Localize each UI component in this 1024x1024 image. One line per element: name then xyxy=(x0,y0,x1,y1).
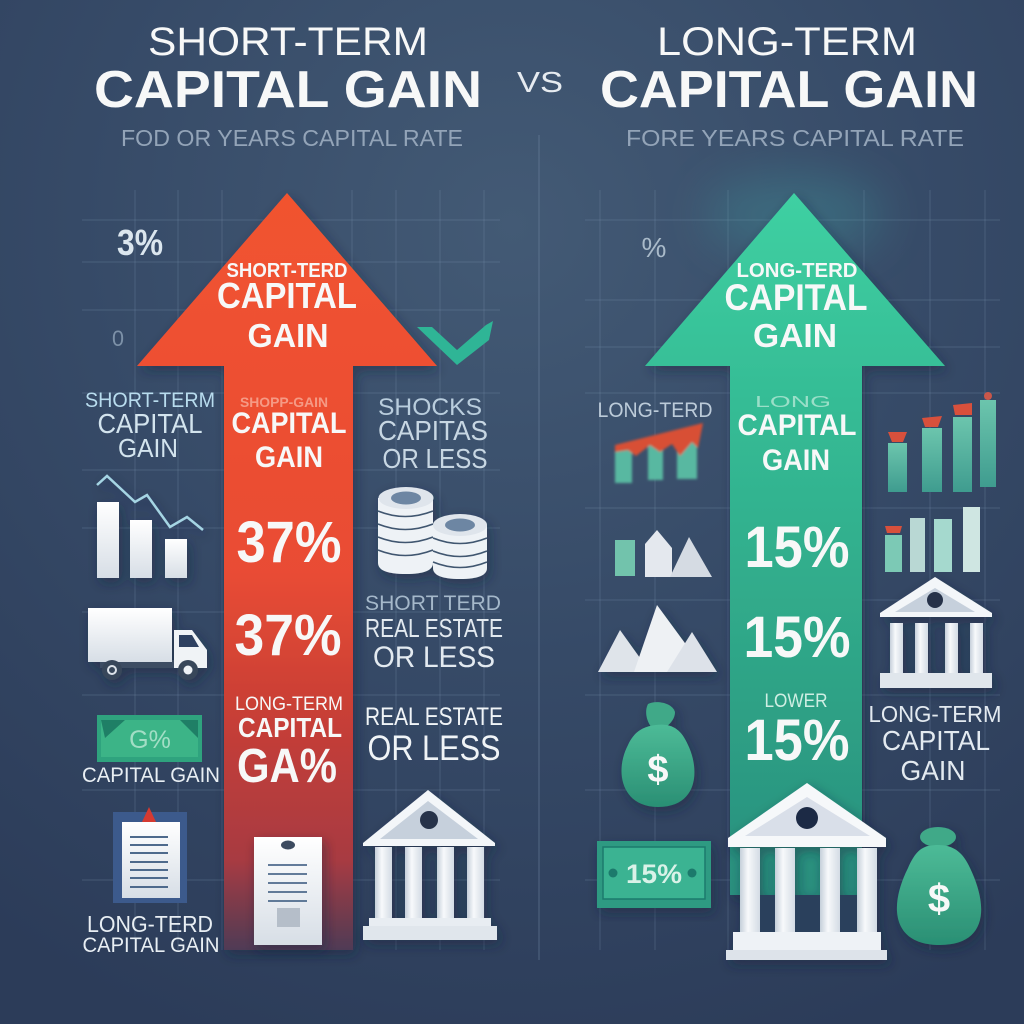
shaft label xyxy=(232,394,346,474)
title: long-term: LONG-TERM xyxy=(657,20,917,64)
shaft label: SHOPP-GAIN xyxy=(240,394,328,410)
icon: banknote xyxy=(97,715,202,762)
icon: bank building, short-term xyxy=(363,790,497,940)
panel: short-term arrow xyxy=(137,193,437,950)
shaft label: GAIN xyxy=(255,441,323,474)
left column: small glyph: 0 xyxy=(112,326,124,351)
right-of-red label: shocks: CAPITAS xyxy=(378,415,488,446)
shaft label: CAPITAL xyxy=(232,407,346,440)
label: short term real estate xyxy=(365,592,503,674)
left column: percent label: 3% xyxy=(117,222,163,263)
rate 15%: 15% xyxy=(744,515,850,580)
left label: short-term capital gain: CAPITAL xyxy=(98,408,202,439)
label: real estate or less: OR LESS xyxy=(368,729,500,768)
label: capital gain: CAPITAL GAIN xyxy=(82,764,220,787)
panel: long-term arrow xyxy=(645,193,945,895)
label: long-term capital gain, right: CAPITAL xyxy=(882,725,990,756)
icon: coin stacks xyxy=(378,487,487,579)
rate 37%: 37% xyxy=(234,603,342,668)
arrow head label xyxy=(724,260,868,354)
title: short-term: SHORT-TERM xyxy=(148,20,428,64)
shaft label lower: LONG-TERM xyxy=(235,694,343,715)
icon: small bars and mountains xyxy=(615,530,712,577)
icon: mixed bars xyxy=(885,507,980,572)
vs label: VS xyxy=(517,67,563,99)
arrow head label: CAPITAL xyxy=(217,275,357,316)
label: long-term capital gain: LONG-TERD xyxy=(87,911,213,937)
arrow head label: LONG-TERD xyxy=(736,260,858,282)
left label: short-term capital gain xyxy=(85,389,215,463)
label: long-term capital gain: CAPITAL GAIN xyxy=(82,934,220,957)
right-of-red label: shocks: OR LESS xyxy=(382,443,488,474)
title: short-term: CAPITAL GAIN xyxy=(94,61,482,119)
icon: money bag, left: $ xyxy=(647,749,669,791)
icon: bank building, large xyxy=(726,783,887,960)
icon: clipboard document xyxy=(113,807,187,903)
rate 37%: 37% xyxy=(236,510,342,575)
label: real estate or less xyxy=(365,703,503,768)
icon: trend check xyxy=(417,321,493,365)
arrow head label: CAPITAL xyxy=(724,277,868,318)
icon: white mountains xyxy=(598,605,717,672)
label: long-term capital gain, right: LONG-TERM xyxy=(868,701,1002,727)
shaft label lower xyxy=(235,694,343,793)
subtitle: short-term: FOD OR YEARS CAPITAL RATE xyxy=(121,125,463,151)
label: short term real estate: SHORT TERD xyxy=(365,592,501,615)
icon: rising bars xyxy=(888,392,996,492)
shaft label lower: CAPITAL xyxy=(238,712,342,743)
title: short-term xyxy=(94,20,482,119)
shaft label lower: GA% xyxy=(237,740,337,793)
shaft label: LONG xyxy=(755,394,831,411)
right-of-red label: shocks xyxy=(378,394,488,474)
label: long-term capital gain, right: GAIN xyxy=(900,755,966,786)
icon: banknote 15%: 15% xyxy=(626,859,682,889)
icon: falling bar chart xyxy=(97,476,203,578)
icon: money bag, right: $ xyxy=(928,877,950,921)
rate lower 15%: 15% xyxy=(744,708,850,773)
title: long-term xyxy=(600,20,978,119)
label: real estate or less: REAL ESTATE xyxy=(365,703,503,731)
left label: short-term capital gain: SHORT-TERM xyxy=(85,389,215,412)
shaft label: GAIN xyxy=(762,444,830,477)
arrow head label: GAIN xyxy=(248,317,328,354)
arrow head label xyxy=(217,260,357,354)
subtitle: long-term: FORE YEARS CAPITAL RATE xyxy=(626,125,964,151)
rate lower 15%: LOWER xyxy=(764,691,828,712)
left-green: percent glyph: % xyxy=(642,232,666,263)
icon: banknote 15% xyxy=(597,841,711,908)
arrow head label: SHORT-TERD xyxy=(226,260,348,282)
label: short term real estate: REAL ESTATE xyxy=(365,613,503,643)
left label: short-term capital gain: GAIN xyxy=(118,433,178,463)
rate 15%: 15% xyxy=(744,605,850,670)
label: long-term: LONG-TERD xyxy=(598,399,712,422)
label: short term real estate: OR LESS xyxy=(373,641,495,674)
label: long-term capital gain xyxy=(82,911,220,957)
icon: banknote: G% xyxy=(129,726,171,754)
title: long-term: CAPITAL GAIN xyxy=(600,61,978,119)
icon: bars with red trend xyxy=(615,423,703,483)
shaft label: CAPITAL xyxy=(738,409,856,442)
icon: delivery truck xyxy=(88,608,207,680)
icon: bank building, top right xyxy=(880,577,992,688)
shaft label xyxy=(738,394,856,477)
right-of-red label: shocks: SHOCKS xyxy=(378,394,482,421)
icon: document on arrow xyxy=(254,837,322,945)
icon: money bag, right xyxy=(897,827,981,945)
label: long-term capital gain, right xyxy=(868,701,1002,786)
arrow head label: GAIN xyxy=(753,317,837,354)
icon: money bag, left xyxy=(621,702,694,807)
